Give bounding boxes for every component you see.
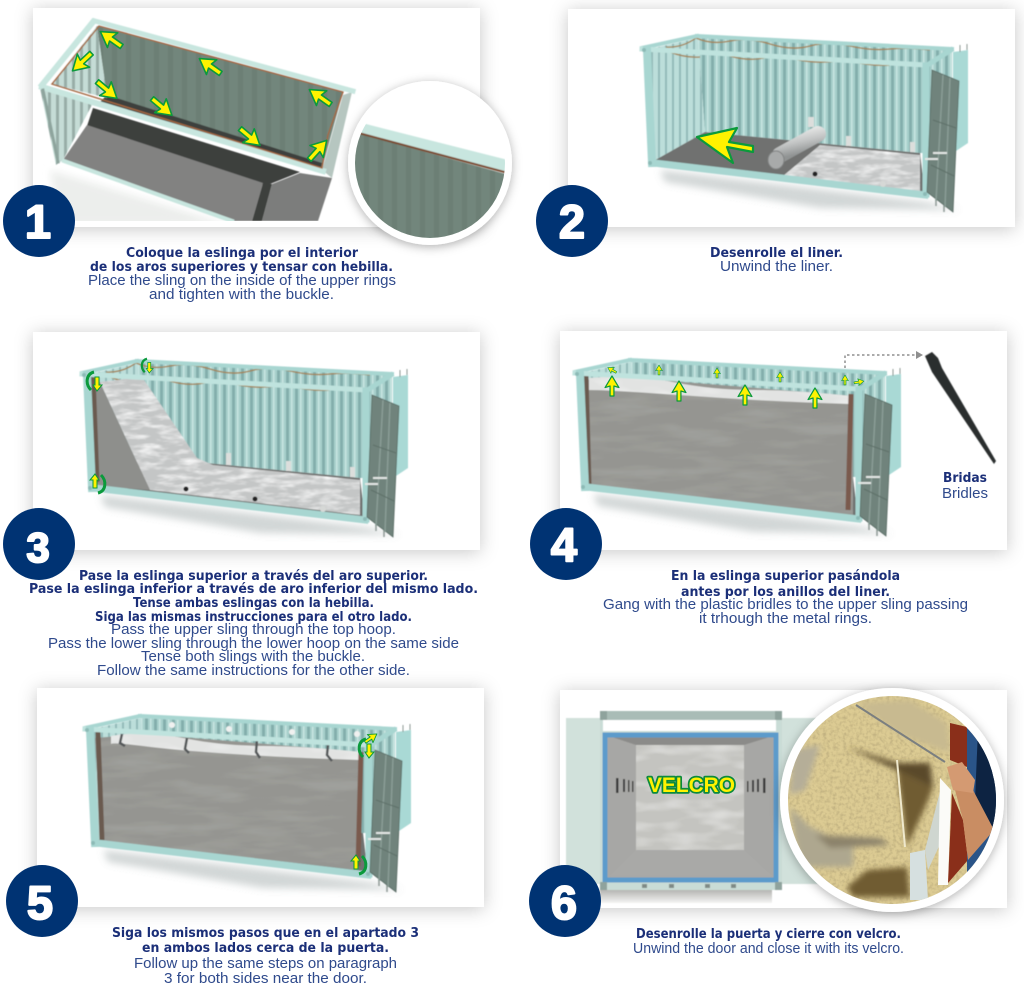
icons: curved tension arrows — [351, 730, 380, 874]
text: step 1 instructions: Place the sling on the inside of the upper rings — [88, 273, 396, 289]
step 3 — [3, 332, 480, 679]
text: step 3 instructions: Pass the upper sling through the top hoop. — [111, 622, 396, 638]
badge: number 1 — [3, 185, 75, 257]
badge: number 2 — [536, 185, 608, 257]
badge: number 4: 4 — [551, 518, 577, 571]
badge: number 2: 2 — [559, 195, 585, 248]
panel: step 3 image card — [33, 332, 480, 550]
text: step 4 instructions: En la eslinga superior pasándola — [671, 568, 900, 584]
text: step 6 instructions: Desenrolle la puerta y cierre con velcro. — [636, 926, 901, 942]
label: bridles: Bridles — [942, 486, 988, 502]
text: step 3 instructions: Pase la eslinga inferior a través de aro inferior del mismo lado. — [29, 581, 478, 597]
text: step 3 instructions: Pass the lower sling through the lower hoop on the same side — [48, 636, 459, 652]
text: step 1 instructions — [88, 245, 396, 303]
badge: number 5: 5 — [27, 876, 53, 929]
container front view — [566, 711, 826, 903]
step 2 — [536, 9, 1015, 275]
text: step 5 instructions — [112, 925, 419, 984]
text: step 1 instructions: Coloque la eslinga por el interior — [126, 245, 358, 261]
text: step 3 instructions: Follow the same instructions for the other side. — [97, 663, 410, 679]
label: velcro: VELCRO — [648, 774, 735, 797]
callout: zoomed detail of sling — [348, 81, 520, 250]
text: step 4 instructions: Gang with the plastic bridles to the upper sling passing — [603, 597, 968, 613]
badge: number 3: 3 — [26, 524, 50, 571]
container with liner roll — [642, 36, 968, 212]
badge: number 6 — [529, 865, 601, 937]
arrows: yellow direction arrows — [66, 24, 336, 166]
badge: number 3 — [3, 508, 75, 580]
text: step 2 instructions: Desenrolle el liner. — [710, 245, 843, 261]
text: step 6 instructions — [633, 926, 904, 957]
label: bridles — [942, 470, 988, 502]
text: step 4 instructions: antes por los anillos del liner. — [681, 584, 890, 600]
arrow: unwind direction — [697, 128, 753, 163]
step 1 — [3, 8, 520, 303]
container seen from above — [40, 21, 353, 225]
badge: number 4 — [530, 508, 602, 580]
container with liner fastened — [85, 716, 411, 892]
text: step 3 instructions: Pase la eslinga superior a través del aro superior. — [79, 568, 428, 584]
panel: step 5 image card — [37, 688, 484, 907]
badge: number 5 — [6, 865, 78, 937]
callout: photo of door closing with velcro — [780, 688, 1007, 912]
text: step 4 instructions — [603, 568, 968, 627]
panel: step 6 image card — [560, 690, 1007, 908]
container with liner on wall — [575, 360, 901, 536]
text: step 2 instructions: Unwind the liner. — [720, 259, 833, 275]
icon: plastic bridle — [925, 352, 996, 464]
icons: curved tension arrows — [87, 359, 153, 493]
panel: step 1 image card — [33, 8, 480, 227]
text: step 5 instructions: Follow up the same steps on paragraph — [134, 956, 397, 972]
text: step 4 instructions: it trhough the metal rings. — [699, 611, 872, 627]
step 4 — [530, 331, 1007, 627]
container with liner being raised — [82, 361, 408, 537]
text: step 1 instructions: de los aros superiores y tensar con hebilla. — [90, 259, 393, 275]
text: step 3 instructions — [29, 568, 478, 679]
text: step 5 instructions: en ambos lados cerca de la puerta. — [142, 940, 389, 956]
step 5 — [6, 688, 484, 984]
panel: step 4 image card — [560, 331, 1007, 550]
label: bridles: Bridas — [943, 470, 987, 486]
text: step 3 instructions: Siga las mismas instrucciones para el otro lado. — [95, 609, 412, 625]
text: step 3 instructions: Tense both slings with the buckle. — [141, 649, 365, 665]
text: step 3 instructions: Tense ambas eslingas con la hebilla. — [133, 595, 374, 611]
arrows: upward fastening arrows — [605, 365, 864, 408]
text: step 1 instructions: and tighten with the buckle. — [149, 287, 334, 303]
text: step 2 instructions — [710, 245, 843, 275]
text: step 5 instructions: Siga los mismos pasos que en el apartado 3 — [112, 925, 419, 941]
arrow: dotted leader to bridle — [845, 351, 923, 368]
step 6 — [529, 688, 1007, 957]
panel: step 2 image card — [568, 9, 1015, 227]
text: step 6 instructions: Unwind the door and close it with its velcro. — [633, 941, 904, 957]
badge: number 1: 1 — [25, 195, 51, 248]
badge: number 6: 6 — [551, 876, 577, 929]
